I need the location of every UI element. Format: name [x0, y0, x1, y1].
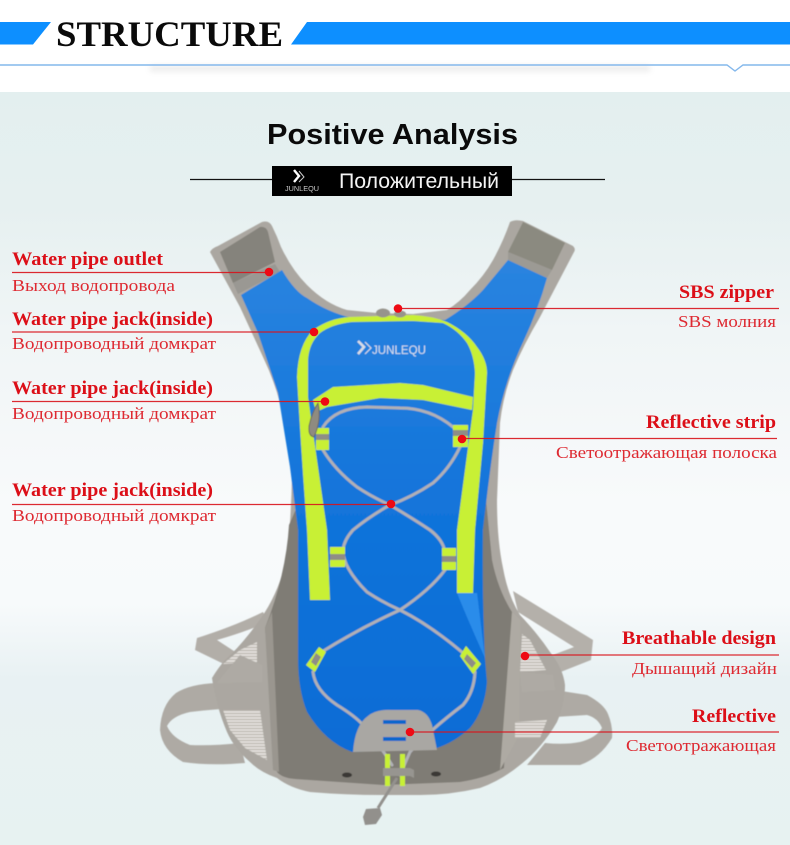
heading: STRUCTURE: STRUCTURE	[56, 14, 283, 54]
right upper strap	[513, 591, 593, 675]
bottom grey tab	[353, 710, 437, 752]
callout: water pipe jack 3: Водопроводный домкрат	[12, 506, 217, 525]
left lower strap loop	[160, 682, 262, 764]
blue main body	[241, 260, 547, 752]
left stitch panel	[265, 612, 279, 772]
callout: water pipe jack 2: Water pipe jack(inside)	[12, 379, 213, 399]
elastic cords	[313, 407, 475, 775]
subtitle badge	[190, 166, 605, 196]
header rule with notch	[0, 65, 790, 71]
title: Positive Analysis: Positive Analysis	[267, 119, 518, 151]
callout: breathable design: Breathable design	[622, 629, 777, 649]
right blue banner slab	[291, 22, 790, 44]
left blue banner slab	[0, 22, 51, 44]
callout: SBS zipper: SBS молния	[678, 312, 776, 331]
left upper strap	[195, 612, 268, 667]
left shoulder band	[233, 264, 280, 294]
icon: brand logo: JUNLEQU	[285, 186, 319, 193]
callout: water pipe jack 1: Water pipe jack(inside)	[12, 310, 213, 330]
callout: water pipe jack 3	[12, 481, 395, 525]
callout: water pipe jack 2: Водопроводный домкрат	[12, 404, 217, 423]
cord tip	[363, 808, 382, 825]
zipper pull	[309, 403, 319, 437]
subtitle text: Положительный	[339, 170, 499, 193]
callout: water pipe outlet: Water pipe outlet	[12, 250, 164, 270]
lighter blue side panel	[457, 593, 485, 658]
backpack outer binding	[210, 220, 575, 795]
callout: reflective strip: Светоотражающая полоска	[556, 443, 778, 462]
left shoulder pad	[220, 227, 275, 283]
callout: water pipe outlet	[12, 250, 273, 295]
callout: breathable design: Дышащий дизайн	[632, 659, 777, 678]
callout: reflective strip: Reflective strip	[646, 413, 776, 433]
callout: breathable design	[521, 629, 779, 678]
header: structure banner	[0, 14, 790, 54]
eyelets	[342, 772, 352, 778]
right stitch panel	[500, 612, 520, 770]
callout: reflective	[406, 707, 779, 755]
callout: reflective strip	[458, 413, 778, 462]
front pocket reflective trim	[297, 315, 487, 600]
tab slots	[383, 720, 406, 724]
callout: water pipe jack 1	[12, 310, 318, 353]
right lower strap loop	[527, 690, 612, 765]
top zipper heads	[376, 308, 390, 318]
dark lower body panel	[265, 500, 512, 785]
cord tabs	[306, 425, 481, 674]
mesh pockets	[221, 634, 553, 760]
callout: water pipe outlet: Выход водопровода	[12, 276, 176, 295]
callout: water pipe jack 3: Water pipe jack(inside)	[12, 481, 213, 501]
callout: water pipe jack 2	[12, 379, 329, 423]
callout: SBS zipper: SBS zipper	[679, 283, 774, 303]
straps over mesh	[217, 655, 262, 683]
callout: reflective: Светоотражающая	[626, 736, 776, 755]
cord end tube	[378, 778, 397, 808]
right shoulder band	[508, 252, 552, 278]
callout: SBS zipper	[394, 283, 779, 331]
icon: bag logo	[358, 341, 426, 357]
pocket zipper stripe	[313, 383, 473, 412]
icon: brand logo	[285, 170, 319, 193]
right shoulder pad	[508, 222, 565, 270]
bottom yellow straps	[385, 754, 390, 786]
cord toggle	[383, 768, 414, 778]
backpack illustration	[160, 220, 612, 825]
callout: water pipe jack 1: Водопроводный домкрат	[12, 334, 217, 353]
callout: reflective: Reflective	[692, 707, 776, 727]
icon: bag logo: JUNLEQU	[372, 343, 426, 357]
